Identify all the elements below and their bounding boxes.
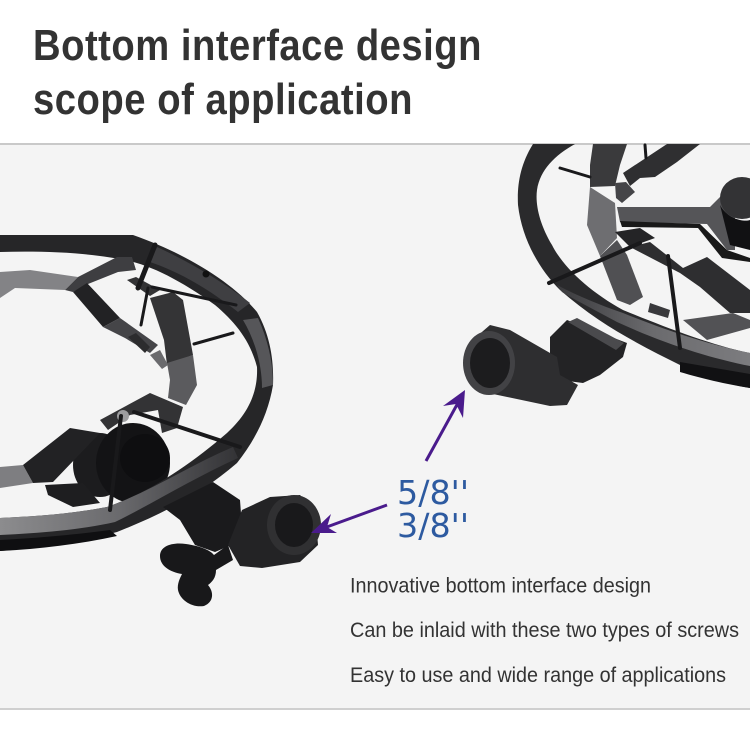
shock mount: right <box>463 144 750 406</box>
title: scope of application <box>33 75 413 124</box>
shock mount: left <box>0 235 321 606</box>
inner curved band <box>150 292 197 405</box>
elastic cords <box>549 145 680 348</box>
title: Bottom interface design <box>33 21 482 70</box>
inner curved band <box>587 144 643 305</box>
wing screw <box>160 544 233 606</box>
outer ring <box>518 144 750 388</box>
feature list: Easy to use and wide range of applications <box>350 663 726 687</box>
thread size labels <box>397 473 469 545</box>
title <box>33 21 482 124</box>
threaded barrel <box>228 495 321 568</box>
mount connector <box>550 318 627 383</box>
hex arm <box>615 228 750 340</box>
knob <box>720 177 750 250</box>
arrow: to left mount socket <box>311 505 387 533</box>
outer ring <box>0 235 273 551</box>
barrel knob <box>73 423 170 503</box>
arrow: to right mount socket <box>426 390 465 461</box>
mount connector <box>163 482 243 552</box>
threaded barrel <box>463 325 578 406</box>
hex lower arm <box>0 393 183 507</box>
thread size labels: 5/8'' <box>397 473 469 512</box>
elastic cords <box>110 245 240 510</box>
photo background panel <box>0 144 750 709</box>
cross arm <box>617 190 735 250</box>
feature list <box>350 574 739 687</box>
thread size labels: 3/8'' <box>397 506 469 545</box>
inner hexagon frame <box>0 257 160 353</box>
feature list: Innovative bottom interface design <box>350 574 651 598</box>
top clip arm <box>615 144 700 203</box>
